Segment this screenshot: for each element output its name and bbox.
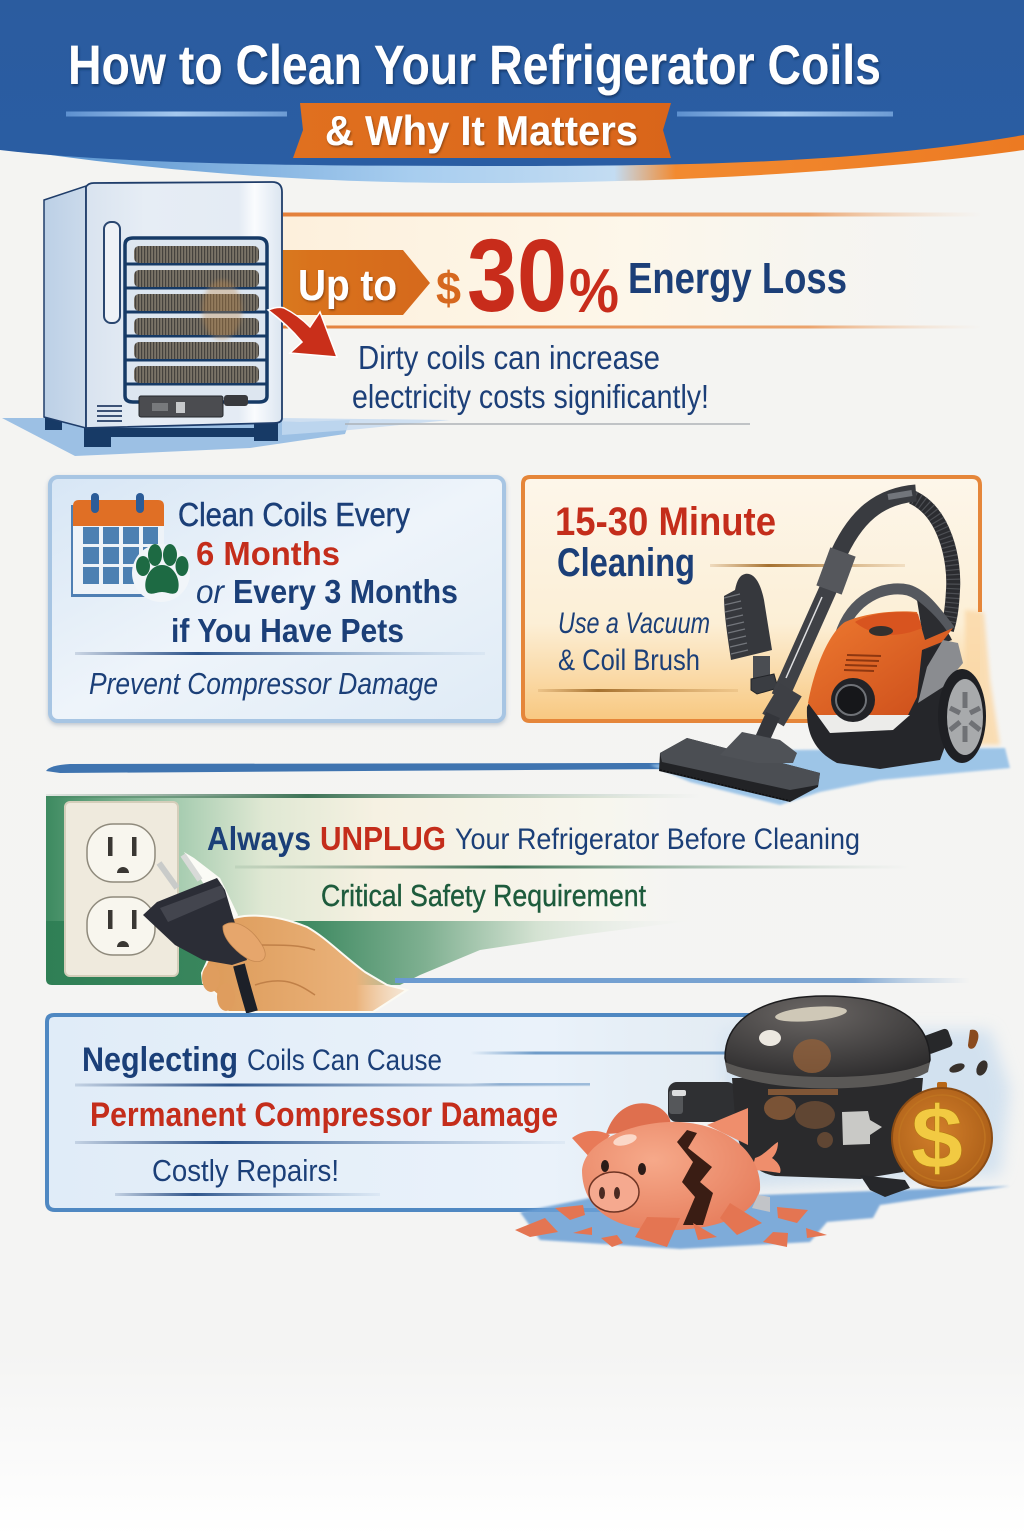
cord xyxy=(239,965,252,1012)
vacuum body xyxy=(807,589,986,769)
tools text xyxy=(558,607,710,677)
icon: paw xyxy=(132,544,190,602)
frequency text: Every 3 Months xyxy=(233,573,458,610)
frequency text: Clean Coils Every xyxy=(178,496,410,533)
time heading: Cleaning xyxy=(557,541,695,585)
consequences text: Costly Repairs! xyxy=(152,1153,339,1188)
consequences text: Neglecting xyxy=(82,1041,238,1079)
blue rule under safety xyxy=(395,978,970,983)
energy band background xyxy=(283,215,983,327)
tools text: & Coil Brush xyxy=(558,644,700,677)
vent slots xyxy=(97,406,122,421)
subtitle ribbon: & Why It Matters xyxy=(325,107,638,154)
frequency text xyxy=(171,496,458,649)
safety heading: UNPLUG xyxy=(320,820,446,857)
header banner xyxy=(0,0,1024,183)
icon: broken piggy bank xyxy=(515,1103,827,1247)
blue floor divider xyxy=(46,763,680,773)
dividers xyxy=(75,1084,590,1196)
prevent damage note: Prevent Compressor Damage xyxy=(89,666,438,701)
time heading: 15-30 Minute xyxy=(555,500,776,544)
prongs xyxy=(159,863,177,888)
floor splash xyxy=(520,1186,1010,1249)
safety note: Critical Safety Requirement xyxy=(321,878,646,913)
time heading divider xyxy=(710,564,905,567)
up to arrow banner: Up to xyxy=(298,261,397,310)
percent sign: % xyxy=(569,257,619,326)
icon: damaged compressor xyxy=(668,996,990,1197)
lower green block xyxy=(46,921,690,985)
time heading xyxy=(555,500,776,585)
dollar sign: $ xyxy=(436,262,461,314)
header blue background xyxy=(0,0,1024,166)
frequency text: if You Have Pets xyxy=(171,612,404,649)
icon: calendar xyxy=(71,493,164,597)
energy loss label: Energy Loss xyxy=(628,254,847,303)
vacuum head xyxy=(659,732,820,802)
panel: safety unplug xyxy=(46,794,970,1012)
safety heading: Your Refrigerator Before Cleaning xyxy=(455,823,860,856)
consequences text: Coils Can Cause xyxy=(247,1044,442,1077)
safety divider xyxy=(235,866,910,868)
orange wash behind vacuum xyxy=(900,610,1000,745)
fingers xyxy=(202,964,220,992)
time card fill xyxy=(523,477,980,721)
wall outlet xyxy=(65,802,178,976)
energy underline xyxy=(345,423,750,425)
icon: dollar coin xyxy=(892,1082,992,1188)
safety heading: Always xyxy=(207,820,311,857)
energy description: Dirty coils can increase xyxy=(358,339,660,376)
thumb xyxy=(223,923,265,962)
title: How to Clean Your Refrigerator Coils xyxy=(68,33,881,96)
vacuum floor shadow xyxy=(650,748,1010,805)
icon: dollar coin: $ xyxy=(911,1088,963,1187)
frequency text: 6 Months xyxy=(196,535,340,572)
consequences card xyxy=(47,1015,760,1210)
frequency card xyxy=(50,477,504,721)
coil brush xyxy=(724,574,778,694)
coil grid xyxy=(124,238,268,417)
tools text: Use a Vacuum xyxy=(558,607,710,640)
red arrow xyxy=(268,307,337,357)
section: energy loss xyxy=(2,182,983,456)
panel: cleaning frequency xyxy=(50,477,504,721)
header swoosh xyxy=(0,134,1024,183)
hose xyxy=(836,493,953,630)
safety heading xyxy=(207,820,860,857)
up to arrow banner xyxy=(283,250,430,315)
frequency text: or xyxy=(196,573,226,610)
energy band bottom rule xyxy=(283,326,983,328)
safety band background xyxy=(46,796,706,921)
energy description xyxy=(352,339,709,415)
wand xyxy=(761,552,843,742)
energy band top rule xyxy=(283,212,983,216)
hand xyxy=(202,916,407,1012)
tools divider xyxy=(538,689,738,692)
consequences text: Permanent Compressor Damage xyxy=(90,1096,558,1134)
icon: vacuum cleaner xyxy=(659,493,986,802)
refrigerator illustration xyxy=(2,182,450,456)
panel: cleaning time xyxy=(46,477,1010,805)
energy description: electricity costs significantly! xyxy=(352,378,709,415)
header rule left xyxy=(66,112,287,116)
stat 30: 30 xyxy=(467,218,567,333)
plug body xyxy=(143,878,247,965)
plug halo xyxy=(184,852,238,930)
frequency divider xyxy=(75,652,485,655)
time card border xyxy=(523,477,980,721)
consequences text xyxy=(82,1041,558,1188)
blue paint wash xyxy=(720,1030,1010,1190)
safety top rule xyxy=(46,794,701,798)
panel: neglect consequences xyxy=(47,996,1010,1249)
paint streaks xyxy=(470,1052,732,1086)
icon: hand and plug xyxy=(143,852,407,1012)
header rule right xyxy=(677,112,893,116)
